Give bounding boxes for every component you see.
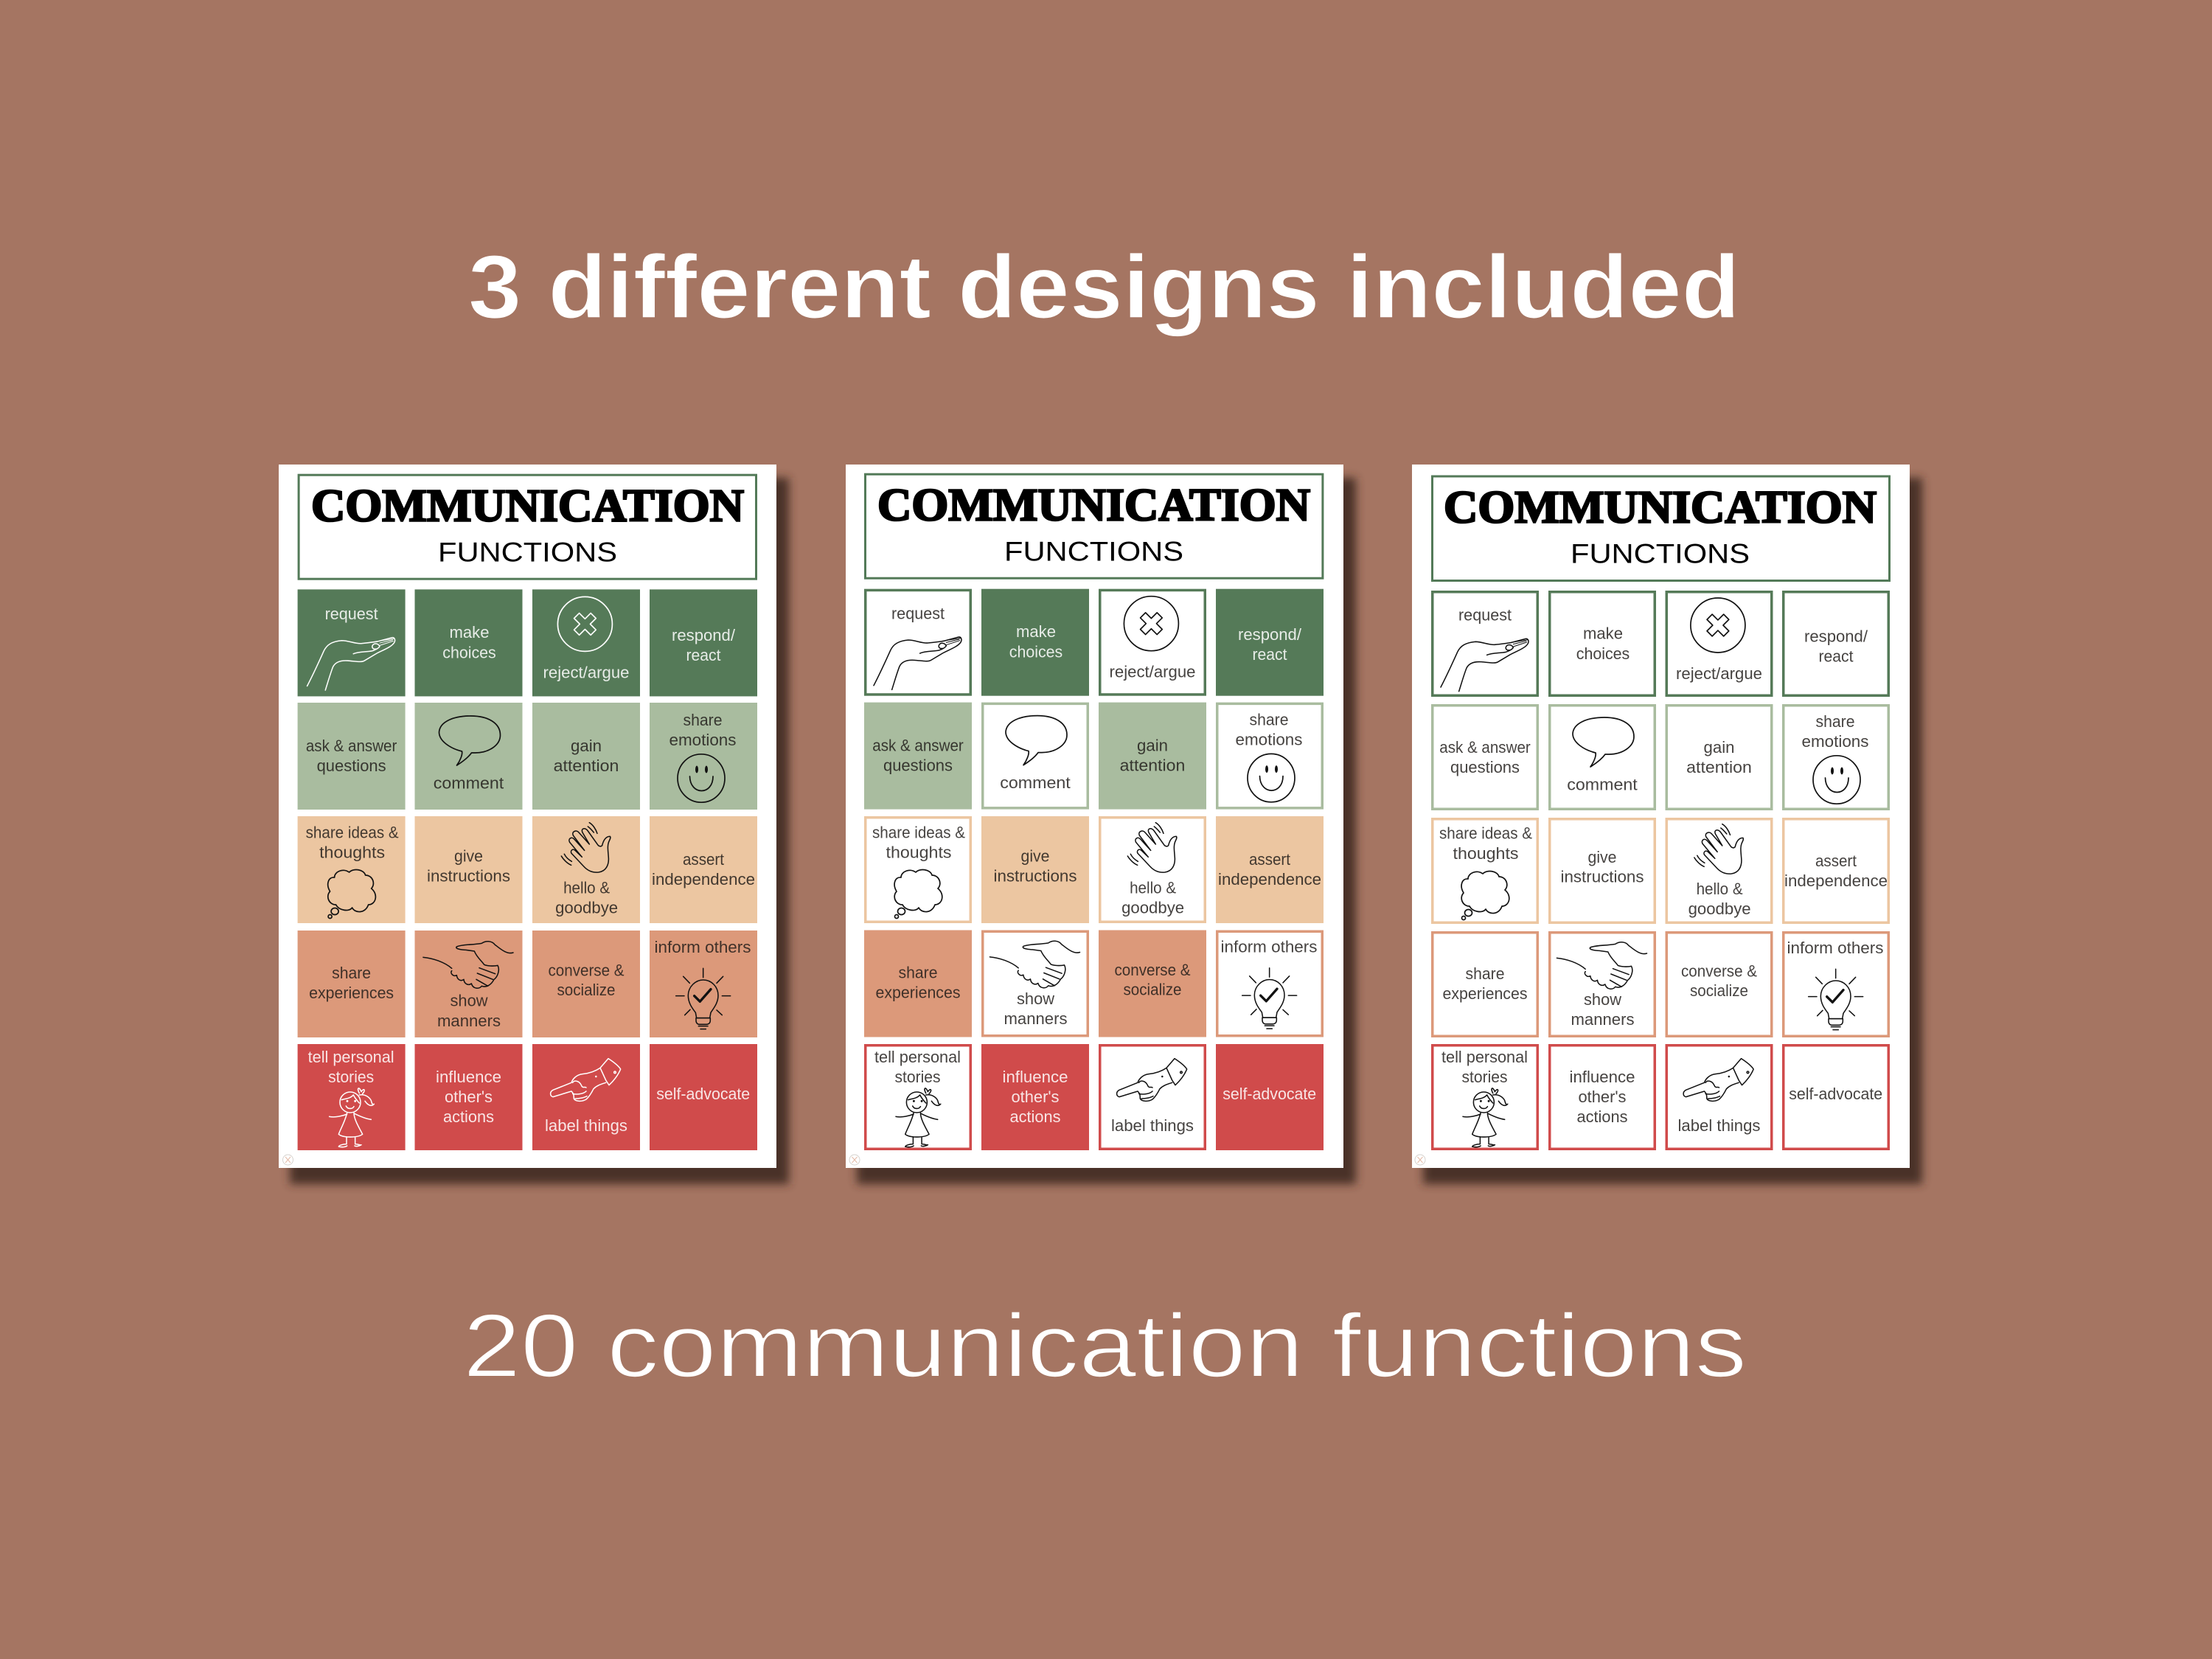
header box bbox=[1432, 476, 1889, 581]
header box: FUNCTIONS bbox=[1004, 535, 1183, 566]
header box: COMMUNICATION bbox=[1444, 482, 1877, 532]
icon: waving hand bbox=[561, 823, 611, 872]
tile: gain attention bbox=[1099, 703, 1206, 810]
tile: ask & answer questions: questions bbox=[883, 757, 953, 775]
tile: converse & socialize: converse & bbox=[549, 961, 625, 980]
tile: self-advocate: self-advocate bbox=[656, 1085, 750, 1103]
tile: ask & answer questions bbox=[864, 703, 972, 810]
icon: pointing hand bbox=[1117, 1059, 1187, 1101]
icon: watermark logo bbox=[849, 1155, 860, 1165]
icon: speech bubble bbox=[1006, 716, 1067, 765]
tile: influence other's actions: actions bbox=[1010, 1107, 1060, 1126]
tile: assert independence bbox=[1784, 819, 1888, 922]
tile: request bbox=[866, 590, 970, 695]
tile: tell personal stories bbox=[1433, 1046, 1537, 1149]
tile: gain attention: gain bbox=[571, 737, 602, 755]
tile: give instructions bbox=[414, 816, 522, 923]
tile: respond/react: respond/ bbox=[1804, 627, 1868, 646]
tile: request: request bbox=[891, 604, 945, 622]
tile: tell personal stories bbox=[866, 1046, 970, 1149]
tile: label things bbox=[1666, 1046, 1772, 1149]
tile: comment bbox=[1550, 706, 1655, 809]
tile: ask & answer questions bbox=[298, 703, 406, 810]
tile: influence other's actions bbox=[1550, 1046, 1655, 1149]
icon: watermark logo bbox=[1415, 1155, 1425, 1165]
tile: inform others bbox=[1784, 933, 1888, 1036]
tile: label things: label things bbox=[545, 1116, 627, 1135]
tile: give instructions: instructions bbox=[1560, 868, 1644, 886]
tile: self-advocate: self-advocate bbox=[1789, 1085, 1882, 1103]
tile: make choices: make bbox=[1016, 622, 1056, 641]
icon: thought cloud bbox=[1461, 872, 1509, 920]
tile: converse & socialize bbox=[1099, 931, 1206, 1037]
tile: hello & goodbye: goodbye bbox=[1688, 900, 1751, 918]
tile: reject/argue: reject/argue bbox=[1676, 664, 1762, 683]
tile: comment: comment bbox=[1567, 775, 1638, 793]
tile: ask & answer questions: questions bbox=[317, 757, 386, 775]
tile: share experiences: share bbox=[898, 963, 938, 982]
header box: COMMUNICATION bbox=[877, 481, 1310, 531]
tile: make choices: choices bbox=[1009, 643, 1062, 661]
tile: respond/react: respond/ bbox=[1238, 625, 1302, 644]
tile: share ideas & thoughts: thoughts bbox=[1453, 844, 1519, 863]
tile: share experiences: experiences bbox=[309, 984, 394, 1002]
tile: share ideas & thoughts bbox=[298, 816, 406, 923]
tile: self-advocate bbox=[1216, 1044, 1324, 1150]
tile: converse & socialize: socialize bbox=[1690, 981, 1748, 1000]
tile: respond/react bbox=[1216, 589, 1324, 696]
tile: influence other's actions: actions bbox=[1576, 1107, 1628, 1126]
icon: speech bubble bbox=[1573, 717, 1634, 767]
tile: share experiences: experiences bbox=[1442, 984, 1528, 1003]
tile: share emotions: share bbox=[1249, 711, 1289, 729]
tile: show manners: show bbox=[450, 992, 488, 1010]
tile: respond/react: react bbox=[1252, 645, 1287, 664]
icon: lightbulb bbox=[1809, 969, 1863, 1030]
tile: give instructions: give bbox=[454, 846, 483, 866]
tile: converse & socialize: socialize bbox=[1124, 981, 1181, 998]
tile: gain attention bbox=[1666, 706, 1772, 809]
header box: COMMUNICATION bbox=[311, 481, 744, 531]
tile: share ideas & thoughts: share ideas & bbox=[872, 823, 965, 842]
icon: smiley bbox=[678, 754, 725, 802]
icon: smiley bbox=[1813, 756, 1860, 804]
subtitle: 20 communication functions bbox=[463, 1295, 1747, 1396]
tile: assert independence bbox=[650, 816, 757, 923]
tile: comment: comment bbox=[1000, 773, 1071, 792]
tile: share emotions: emotions bbox=[669, 731, 736, 749]
tile: assert independence: assert bbox=[1249, 850, 1290, 869]
poster: design 3 all outlined bbox=[1412, 465, 1922, 1184]
header box bbox=[866, 474, 1323, 578]
tile: gain attention: gain bbox=[1703, 738, 1734, 757]
tile: respond/react: react bbox=[686, 646, 721, 664]
tile: self-advocate: self-advocate bbox=[1222, 1085, 1316, 1103]
tile: request: request bbox=[325, 605, 378, 623]
tile: give instructions bbox=[1550, 819, 1655, 922]
tile: gain attention: gain bbox=[1137, 736, 1168, 754]
tile: show manners: show bbox=[1584, 990, 1621, 1009]
tile: label things: label things bbox=[1678, 1116, 1761, 1135]
tile: tell personal stories: tell personal bbox=[874, 1048, 961, 1066]
poster: design 1 all filled bbox=[279, 465, 789, 1184]
icon: circled x bbox=[1124, 597, 1178, 651]
tile: share emotions bbox=[1784, 706, 1888, 809]
tile: assert independence bbox=[1216, 816, 1324, 923]
tile: respond/react bbox=[1784, 592, 1888, 695]
tile: make choices: choices bbox=[442, 643, 496, 661]
icon: smiley bbox=[1248, 754, 1295, 802]
tile: comment bbox=[414, 703, 522, 810]
tile: request bbox=[298, 589, 406, 696]
header box: FUNCTIONS bbox=[1571, 538, 1750, 569]
tile: ask & answer questions: questions bbox=[1450, 758, 1520, 776]
tile: show manners: manners bbox=[1004, 1009, 1067, 1028]
tile: influence other's actions: other's bbox=[1578, 1088, 1627, 1106]
tile: inform others: inform others bbox=[1787, 939, 1883, 957]
tile: gain attention: attention bbox=[554, 757, 619, 775]
tile: share emotions bbox=[650, 703, 757, 810]
tile: make choices: make bbox=[1583, 624, 1623, 642]
icon: waving hand bbox=[1694, 824, 1743, 874]
tile: make choices: choices bbox=[1576, 644, 1630, 663]
icon: speech bubble bbox=[439, 716, 500, 765]
tile: give instructions: instructions bbox=[427, 867, 510, 885]
tile: self-advocate bbox=[1784, 1046, 1888, 1149]
tile: show manners bbox=[414, 931, 522, 1037]
tile: hello & goodbye: goodbye bbox=[555, 898, 618, 917]
tile: show manners bbox=[1550, 933, 1655, 1036]
tile: influence other's actions: influence bbox=[436, 1068, 501, 1086]
tile: assert independence: independence bbox=[1218, 870, 1321, 888]
tile: make choices bbox=[1550, 592, 1655, 695]
tile: share experiences: share bbox=[1466, 964, 1504, 983]
tile: tell personal stories: stories bbox=[328, 1068, 374, 1086]
tile: give instructions bbox=[981, 816, 1089, 923]
tile: reject/argue bbox=[1666, 592, 1772, 695]
tile: self-advocate bbox=[650, 1044, 757, 1150]
tile: share experiences: share bbox=[332, 964, 371, 982]
tile: show manners: manners bbox=[1571, 1010, 1634, 1029]
tile: make choices bbox=[414, 589, 522, 696]
tile: converse & socialize: socialize bbox=[557, 981, 615, 999]
tile: inform others: inform others bbox=[655, 938, 751, 956]
tile: hello & goodbye: hello & bbox=[563, 879, 610, 897]
tile: hello & goodbye: goodbye bbox=[1121, 898, 1184, 917]
icon: waving hand bbox=[1127, 823, 1177, 872]
tile: influence other's actions: other's bbox=[1012, 1088, 1059, 1106]
icon: handshake bbox=[1557, 942, 1646, 989]
tile: make choices bbox=[981, 589, 1089, 696]
tile: share ideas & thoughts: thoughts bbox=[886, 844, 951, 861]
tile: share ideas & thoughts bbox=[866, 818, 970, 922]
tile: share experiences bbox=[1433, 933, 1537, 1036]
icon: thought cloud bbox=[328, 870, 375, 919]
tile: influence other's actions: influence bbox=[1569, 1068, 1635, 1086]
icon: thought cloud bbox=[894, 870, 942, 919]
tile: share experiences bbox=[864, 931, 972, 1037]
header box: FUNCTIONS bbox=[438, 537, 617, 568]
tile: influence other's actions: actions bbox=[443, 1107, 494, 1126]
tile: share emotions: share bbox=[683, 711, 723, 729]
tile: inform others: inform others bbox=[1221, 938, 1317, 956]
tile: hello & goodbye bbox=[1666, 819, 1772, 922]
tile: respond/react: react bbox=[1818, 647, 1854, 665]
icon: circled x bbox=[557, 597, 612, 651]
icon: circled x bbox=[1691, 598, 1745, 653]
tile: hello & goodbye bbox=[532, 816, 640, 923]
tile: share ideas & thoughts: share ideas & bbox=[306, 823, 399, 842]
tile: share emotions: emotions bbox=[1802, 732, 1868, 751]
tile: inform others bbox=[650, 931, 757, 1037]
tile: label things: label things bbox=[1111, 1116, 1194, 1135]
icon: lightbulb bbox=[676, 968, 731, 1029]
tile: assert independence: independence bbox=[652, 870, 755, 888]
tile: assert independence: assert bbox=[1815, 852, 1857, 870]
tile: reject/argue bbox=[1100, 590, 1205, 695]
tile: show manners: manners bbox=[437, 1012, 501, 1030]
icon: open hand bbox=[874, 637, 961, 689]
tile: label things bbox=[532, 1044, 640, 1150]
tile: converse & socialize: converse & bbox=[1681, 962, 1757, 981]
tile: inform others bbox=[1217, 931, 1322, 1036]
icon: watermark logo bbox=[283, 1155, 293, 1165]
icon: handshake bbox=[423, 942, 513, 988]
tile: share emotions bbox=[1217, 703, 1322, 808]
tile: ask & answer questions: ask & answer bbox=[306, 737, 397, 755]
icon: handshake bbox=[990, 941, 1079, 988]
icon: open hand bbox=[1441, 639, 1528, 692]
tile: ask & answer questions: ask & answer bbox=[872, 736, 964, 754]
tile: show manners bbox=[983, 931, 1088, 1036]
tile: give instructions: give bbox=[1020, 846, 1050, 866]
tile: hello & goodbye: hello & bbox=[1697, 880, 1743, 898]
tile: ask & answer questions bbox=[1433, 706, 1537, 809]
tile: gain attention: attention bbox=[1120, 757, 1185, 775]
tile: converse & socialize bbox=[1666, 933, 1772, 1036]
tile: influence other's actions: other's bbox=[445, 1088, 493, 1106]
tile: give instructions: give bbox=[1588, 848, 1616, 866]
tile: tell personal stories bbox=[298, 1044, 406, 1150]
icon: pointing hand bbox=[551, 1059, 621, 1101]
tile: make choices: make bbox=[450, 623, 490, 641]
tile: share ideas & thoughts: thoughts bbox=[319, 844, 385, 861]
tile: share ideas & thoughts: share ideas & bbox=[1439, 824, 1532, 843]
tile: request: request bbox=[1458, 606, 1512, 625]
tile: label things bbox=[1100, 1046, 1205, 1149]
icon: girl bbox=[896, 1088, 941, 1147]
tile: share ideas & thoughts bbox=[1433, 819, 1537, 922]
tile: converse & socialize: converse & bbox=[1115, 961, 1191, 979]
icon: open hand bbox=[307, 638, 395, 690]
tile: request bbox=[1433, 592, 1537, 695]
header box bbox=[299, 475, 757, 579]
tile: share emotions: emotions bbox=[1236, 731, 1302, 749]
tile: influence other's actions: influence bbox=[1003, 1068, 1068, 1086]
tile: give instructions: instructions bbox=[994, 867, 1077, 885]
tile: share experiences bbox=[298, 931, 406, 1037]
tile: reject/argue: reject/argue bbox=[1109, 663, 1196, 681]
tile: converse & socialize bbox=[532, 931, 640, 1037]
icon: pointing hand bbox=[1683, 1059, 1753, 1101]
tile: share experiences: experiences bbox=[876, 984, 960, 1001]
poster: design 2 alternating bbox=[846, 465, 1356, 1184]
icon: girl bbox=[1463, 1088, 1508, 1147]
tile: tell personal stories: stories bbox=[1461, 1068, 1507, 1086]
tile: assert independence: independence bbox=[1784, 872, 1888, 890]
title: 3 different designs included bbox=[468, 237, 1740, 337]
tile: assert independence: assert bbox=[683, 850, 724, 869]
tile: respond/react bbox=[650, 589, 757, 696]
tile: tell personal stories: tell personal bbox=[1441, 1048, 1528, 1066]
icon: lightbulb bbox=[1242, 968, 1297, 1029]
tile: comment bbox=[983, 703, 1088, 808]
tile: tell personal stories: stories bbox=[895, 1068, 941, 1086]
tile: reject/argue: reject/argue bbox=[543, 663, 630, 681]
tile: hello & goodbye: hello & bbox=[1130, 879, 1176, 897]
tile: tell personal stories: tell personal bbox=[308, 1048, 394, 1066]
tile: show manners: show bbox=[1017, 990, 1054, 1008]
tile: share emotions: share bbox=[1815, 712, 1855, 731]
tile: comment: comment bbox=[434, 773, 504, 792]
icon: girl bbox=[330, 1088, 374, 1147]
tile: influence other's actions bbox=[414, 1044, 522, 1150]
tile: ask & answer questions: ask & answer bbox=[1439, 738, 1531, 757]
tile: reject/argue bbox=[532, 589, 640, 696]
tile: gain attention bbox=[532, 703, 640, 810]
tile: hello & goodbye bbox=[1100, 818, 1205, 922]
tile: influence other's actions bbox=[981, 1044, 1089, 1150]
tile: gain attention: attention bbox=[1686, 758, 1752, 776]
tile: respond/react: respond/ bbox=[672, 626, 736, 644]
